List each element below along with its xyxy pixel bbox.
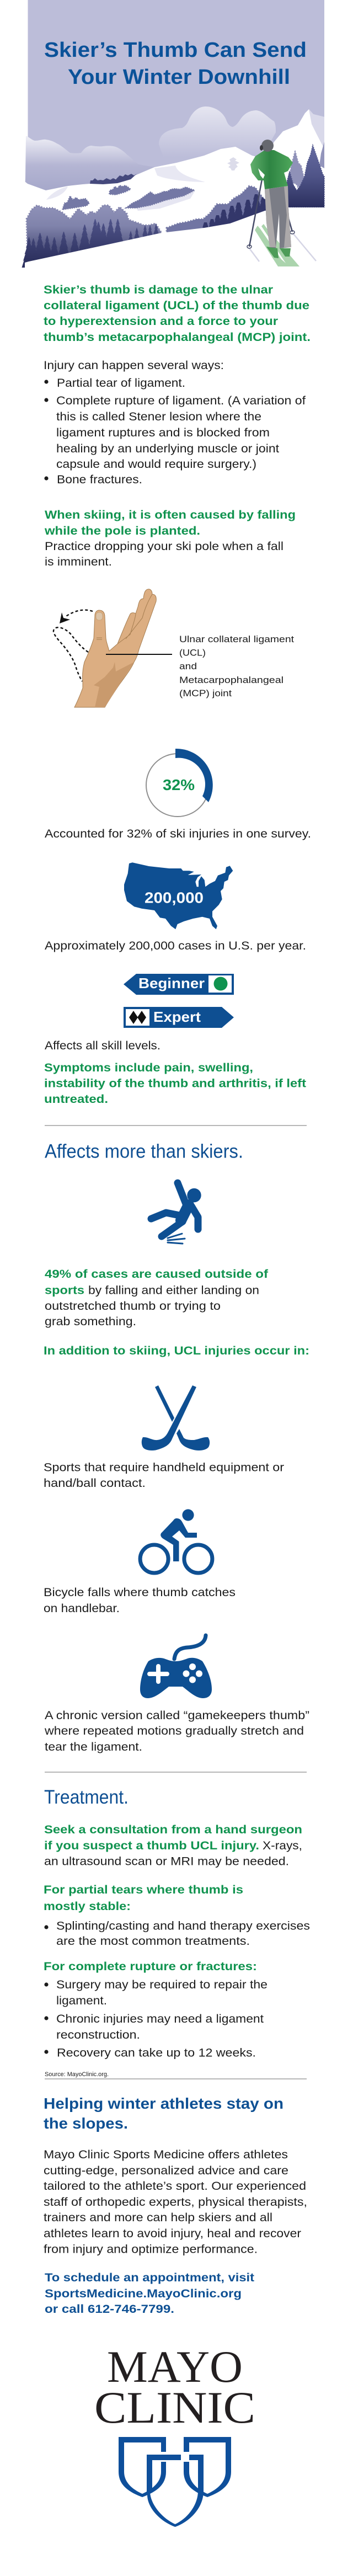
thumbnail — [96, 612, 103, 620]
ear muff — [260, 145, 263, 151]
finger lines — [97, 594, 152, 644]
icon: game controller — [140, 1635, 212, 1698]
49% paragraph: outstretched thumb or trying to — [45, 1300, 221, 1313]
injury types list: Complete rupture of ligament. (A variation of — [56, 394, 306, 407]
partial tears list — [44, 1883, 310, 1948]
icon: cyclist — [140, 1509, 212, 1573]
forest left, light layer — [26, 205, 162, 265]
Mayo Clinic Sports Medicine paragraph: staff of orthopedic experts, physical therapists, — [44, 2196, 307, 2209]
right cloud — [159, 106, 276, 163]
hand diagram label — [179, 634, 294, 698]
complete rupture list: Recovery can take up to 12 weeks. — [57, 2047, 256, 2059]
text: handheld equipment — [44, 1461, 284, 1490]
injury types list: Bone fractures. — [57, 473, 142, 486]
injury types list: this is called Stener lesion where the — [56, 410, 261, 423]
complete rupture list: For complete rupture or fractures: — [44, 1960, 257, 1973]
definition paragraph — [44, 283, 311, 344]
call to action: To schedule an appointment, visit — [45, 2271, 254, 2284]
source note: Source: MayoClinic.org. — [45, 2071, 109, 2078]
snowy foreground — [25, 207, 331, 276]
text: bicycle falls: on handlebar. — [44, 1602, 120, 1615]
skiing cause paragraph: while the pole is planted. — [44, 524, 200, 537]
Mayo Clinic wordmark: MAYO — [107, 2342, 243, 2392]
centre shield — [147, 2455, 204, 2527]
complete rupture list: ligament. — [56, 1994, 107, 2007]
icon: falling person — [151, 1183, 201, 1244]
consultation paragraph: X-rays, — [263, 1839, 302, 1852]
helmet — [261, 140, 274, 152]
49% paragraph: sports — [45, 1283, 84, 1297]
hand shadow — [94, 662, 134, 707]
title: Skier’s Thumb Can Send — [44, 39, 307, 62]
injury types list: ligament ruptures and is blocked from — [56, 426, 270, 439]
consultation paragraph: if you suspect a thumb UCL injury. — [44, 1839, 259, 1852]
complete rupture list: reconstruction. — [56, 2029, 140, 2041]
symptoms text: Symptoms include pain, swelling, — [44, 1061, 253, 1074]
forest centre, dark trees — [200, 194, 267, 239]
subheading: other injuries: In addition to skiing, UCL injuries occur in: — [44, 1344, 309, 1357]
definition paragraph: thumb’s metacarpophalangeal (MCP) joint. — [44, 330, 311, 344]
injury types list: capsule and would require surgery.) — [56, 458, 256, 471]
Mayo Clinic Sports Medicine paragraph: tailored to the athlete’s sport. Our experienced — [44, 2180, 306, 2193]
slope shading — [46, 166, 205, 200]
49% paragraph — [45, 1267, 269, 1328]
tree clump shadows — [136, 191, 195, 211]
distant snowy peak — [265, 109, 324, 207]
sign: beginner — [124, 974, 234, 995]
main snow slope — [22, 147, 270, 265]
shaded face of peak — [309, 109, 324, 149]
definition paragraph: to hyperextension and a force to your — [44, 314, 279, 328]
skis — [255, 224, 299, 266]
US map with 200,000 — [124, 862, 233, 929]
call to action: or call 612-746-7799. — [45, 2302, 174, 2316]
tree clump upper — [90, 174, 137, 184]
partial tears list: are the most common treatments. — [56, 1935, 250, 1948]
49% paragraph: 49% of cases are caused outside of — [45, 1267, 269, 1281]
text: gamekeepers thumb: tear the ligament. — [45, 1741, 142, 1753]
hero illustration: skier overlooking mountains — [22, 0, 331, 276]
crossing gaps — [145, 2452, 205, 2462]
right shield — [184, 2437, 231, 2497]
dashed motion arrow — [65, 610, 93, 617]
skiing cause paragraph: is imminent. — [45, 556, 112, 568]
left cloud — [25, 136, 156, 190]
complete rupture list: Chronic injuries may need a ligament — [56, 2013, 264, 2025]
title — [44, 39, 307, 89]
text: gamekeepers thumb: where repeated motions gradually stretch and — [44, 1725, 304, 1737]
text: bicycle falls — [44, 1586, 236, 1615]
call to action: SportsMedicine.MayoClinic.org — [45, 2287, 242, 2300]
trousers — [265, 186, 291, 248]
Mayo Clinic Sports Medicine paragraph: Mayo Clinic Sports Medicine offers athletes — [44, 2148, 288, 2161]
icon: hand — [74, 589, 156, 707]
Mayo Clinic shield logo — [119, 2437, 231, 2527]
injury types list: healing by an underlying muscle or joint — [56, 442, 279, 455]
Mayo Clinic wordmark — [94, 2342, 255, 2433]
hand diagram label: (UCL) — [179, 648, 206, 658]
pole shadows — [249, 234, 316, 262]
49% paragraph: grab something. — [45, 1315, 136, 1328]
heading: treatment: Treatment. — [44, 1786, 129, 1808]
skiing cause paragraph: When skiing, it is often caused by falling — [45, 508, 296, 521]
statistic: ski injuries share: Accounted for 32% of ski injuries in one survey. — [45, 828, 311, 840]
boots — [266, 247, 291, 258]
sign: expert: Expert — [153, 1009, 201, 1025]
consultation paragraph: an ultrasound scan or MRI may be needed. — [44, 1855, 289, 1868]
symptoms text: instability of the thumb and arthritis, if left — [44, 1077, 306, 1090]
hand diagram label: and — [179, 661, 197, 671]
left shield — [119, 2437, 166, 2497]
symptoms text — [44, 1061, 306, 1106]
skiing cause paragraph: Practice dropping your ski pole when a fall — [45, 540, 284, 553]
heading: helping winter athletes: the slopes. — [44, 2115, 128, 2132]
heading: helping winter athletes: Helping winter athletes stay on — [44, 2095, 284, 2112]
text: bicycle falls: Bicycle falls where thumb catches — [44, 1586, 236, 1599]
leader line — [106, 654, 172, 655]
consultation paragraph: Seek a consultation from a hand surgeon — [44, 1823, 302, 1836]
sky background — [28, 0, 324, 243]
text: gamekeepers thumb — [44, 1709, 309, 1753]
injury types list: Partial tear of ligament. — [57, 377, 185, 390]
consultation paragraph — [44, 1823, 302, 1868]
light tree behind skier — [288, 151, 304, 188]
ski poles — [247, 179, 295, 248]
pale tree strip at right edge — [319, 142, 324, 168]
forest left, dark trees — [22, 219, 162, 269]
hand diagram label: (MCP) joint — [179, 688, 232, 698]
arm gap — [258, 168, 265, 179]
skill levels text: Affects all skill levels. — [45, 1039, 161, 1052]
hand diagram — [54, 589, 172, 707]
trouser highlights — [265, 186, 291, 247]
text: handheld equipment: Sports that require handheld equipment or — [44, 1461, 284, 1474]
arrowhead — [60, 612, 70, 623]
hand diagram label: Ulnar collateral ligament — [179, 634, 294, 644]
skiing cause paragraph — [44, 508, 296, 568]
Mayo Clinic Sports Medicine paragraph: trainers and more can help skiers and all — [44, 2211, 272, 2224]
heading: affects more than skiers: Affects more than skiers. — [45, 1141, 243, 1162]
tree clumps mid-slope — [62, 185, 195, 210]
Mayo Clinic Sports Medicine paragraph: cutting-edge, personalized advice and care — [44, 2164, 288, 2177]
call to action — [45, 2271, 254, 2316]
Mayo Clinic Sports Medicine paragraph — [44, 2148, 307, 2255]
dashed hyperextended thumb — [54, 627, 88, 681]
partial tears list: Splinting/casting and hand therapy exercises — [56, 1920, 310, 1932]
definition paragraph: collateral ligament (UCL) of the thumb due — [44, 299, 309, 312]
title: Your Winter Downhill — [68, 66, 290, 89]
dark forest right — [287, 145, 324, 207]
injury types list — [44, 359, 306, 486]
injury types list: Injury can happen several ways: — [44, 359, 224, 372]
Mayo Clinic Sports Medicine paragraph: athletes learn to avoid injury, heal and recover — [44, 2227, 301, 2240]
hand diagram label: Metacarpophalangeal — [179, 675, 284, 685]
donut chart: 32% — [146, 749, 213, 817]
US map with 200,000: 200,000 — [145, 889, 204, 906]
statistic: US cases: Approximately 200,000 cases in U.S. per year. — [45, 940, 306, 952]
partial tears list: For partial tears where thumb is — [44, 1883, 243, 1896]
sign: expert — [124, 1007, 234, 1028]
partial tears list: mostly stable: — [44, 1900, 131, 1913]
distant pale tree — [227, 157, 239, 170]
symptoms text: untreated. — [44, 1092, 108, 1106]
text: handheld equipment: hand/ball contact. — [44, 1477, 146, 1490]
donut chart: 32%: 32% — [163, 776, 195, 793]
heading: helping winter athletes — [44, 2095, 284, 2132]
Mayo Clinic Sports Medicine paragraph: from injury and optimize performance. — [44, 2243, 258, 2255]
icon: hockey sticks — [142, 1385, 210, 1450]
Mayo Clinic wordmark: CLINIC — [94, 2382, 255, 2433]
complete rupture list: Surgery may be required to repair the — [56, 1978, 268, 1991]
forest centre, light layer — [167, 186, 266, 237]
complete rupture list — [44, 1960, 268, 2059]
text: gamekeepers thumb: A chronic version called “gamekeepers thumb” — [45, 1709, 309, 1722]
definition paragraph: Skier’s thumb is damage to the ulnar — [44, 283, 274, 296]
green jacket — [250, 150, 293, 189]
49% paragraph: by falling and either landing on — [88, 1284, 259, 1297]
sign: beginner: Beginner — [138, 975, 205, 991]
